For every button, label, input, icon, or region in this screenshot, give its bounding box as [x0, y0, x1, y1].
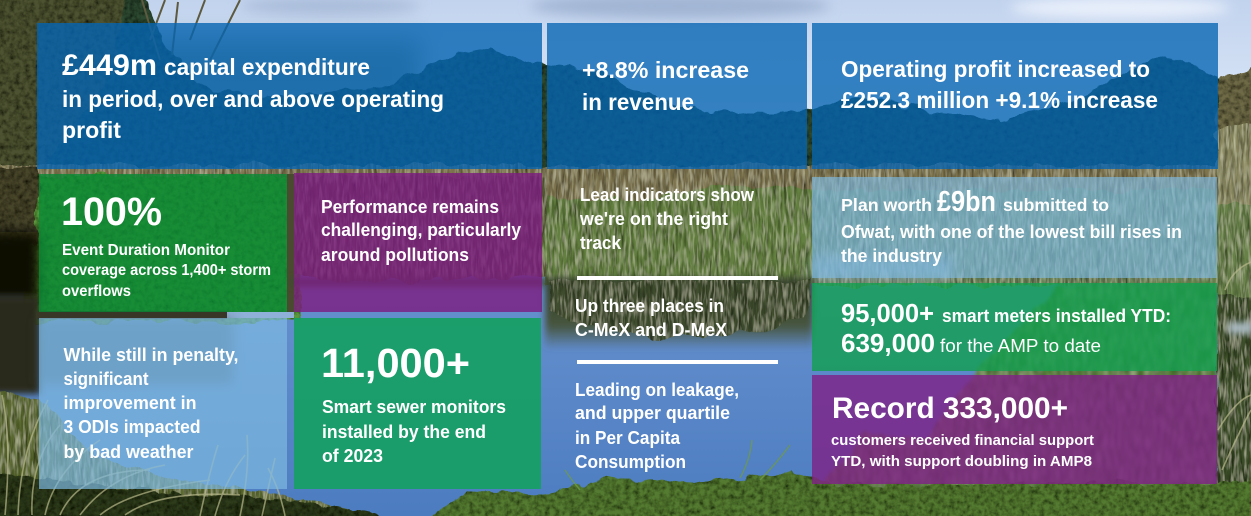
foliage behind green and purple right panels [820, 280, 1216, 490]
text: capital expenditure [62, 54, 444, 143]
panel: business plan: Ofwat, with one of the lowest bill rises in [841, 222, 1182, 242]
text: EDM coverage: coverage across 1,400+ storm [62, 262, 271, 279]
panel: revenue: +8.8% increase [582, 57, 749, 83]
panel: smart meters [812, 283, 1217, 371]
text: EDM coverage [62, 242, 271, 300]
panel: performance on pollutions [294, 173, 542, 312]
grass behind green panel [26, 176, 300, 322]
distant tree line [0, 0, 1251, 185]
panel: event duration monitors [39, 174, 287, 312]
right trees [1218, 62, 1251, 175]
text: capital expenditure: in period, over and above operating [62, 86, 444, 112]
foreground left grass [0, 388, 400, 516]
reed band [0, 165, 1251, 210]
panel: ODI penalty improvement: While still in penalty, [64, 344, 238, 365]
text: sewer monitors: installed by the end [322, 421, 486, 442]
text: leakage: in Per Capita [575, 427, 681, 448]
panel: operating profit: Operating profit increased to [841, 56, 1150, 82]
panel: ODI penalty improvement: significant [64, 368, 148, 389]
haze of trees behind first panel [120, 40, 420, 110]
panel: smart meters: smart meters installed YTD: [942, 306, 1171, 326]
stat: 95,000+: 95,000+ [841, 298, 934, 328]
panel: business plan [812, 177, 1217, 278]
panel: performance on pollutions: around pollutions [321, 244, 469, 265]
panel: smart sewer monitors [294, 318, 541, 489]
panel: ODI penalty improvement: 3 ODIs impacted [64, 416, 200, 437]
text: sewer monitors: Smart sewer monitors [322, 396, 506, 417]
reflection [290, 278, 545, 286]
text: leakage [575, 379, 739, 472]
reeds behind teal panel [812, 190, 1220, 286]
panel: customer financial support: customers received financial support [831, 432, 1094, 449]
stat: £449m: £449m [62, 49, 157, 82]
text: customer rankings [575, 295, 728, 340]
text: capital expenditure: profit [62, 117, 121, 143]
text: lead indicators [579, 184, 755, 253]
left dark bank [0, 165, 38, 245]
stat: 11,000+: 11,000+ [321, 340, 470, 386]
text: capital expenditure: capital expenditure [164, 54, 370, 80]
text: leakage: Leading on leakage, [575, 379, 739, 400]
panel: customer financial support: Record 333,000+ [832, 392, 1068, 425]
panel: performance on pollutions: challenging, particularly [321, 219, 522, 240]
text: lead indicators: track [580, 232, 622, 253]
panel: ODI penalty improvement [39, 318, 287, 489]
reeds behind purple panel [290, 176, 545, 282]
text: EDM coverage: overflows [62, 283, 131, 300]
panel: ODI penalty improvement: improvement in [64, 392, 196, 413]
panel: customer financial support: YTD, with support doubling in AMP8 [831, 453, 1092, 470]
panel: operating profit: £252.3 million +9.1% increase [841, 87, 1158, 113]
text: leakage: Consumption [575, 451, 686, 472]
panel: business plan: Plan worth [841, 195, 932, 215]
reed blades [2, 262, 1251, 516]
center green reeds [545, 186, 815, 285]
panel: revenue [547, 23, 807, 169]
panel: performance on pollutions: Performance remains [321, 196, 499, 217]
panel: smart meters: for the AMP to date [940, 336, 1101, 356]
text: sewer monitors: of 2023 [322, 445, 383, 466]
panel: operating profit [812, 23, 1218, 169]
text: lead indicators: we're on the right [579, 208, 728, 229]
text: sewer monitors [322, 396, 506, 466]
panel: customer financial support [812, 375, 1217, 484]
text: customer rankings: C-MeX and D-MeX [575, 319, 728, 340]
panel: capital expenditure [37, 23, 542, 169]
bank in the gap between green and purple panels [287, 174, 294, 312]
stat: £9bn: £9bn [937, 186, 996, 218]
panel: business plan: submitted to [1003, 195, 1109, 215]
water strip beneath green panel [227, 312, 294, 318]
left trees [0, 0, 125, 175]
sky [0, 0, 1251, 130]
foreground bottom bank [395, 470, 1251, 516]
stat: 100%: 100% [61, 190, 162, 234]
stat: 639,000: 639,000 [841, 328, 935, 358]
text: EDM coverage: Event Duration Monitor [62, 242, 230, 259]
panel: business plan: the industry [841, 246, 942, 266]
right bank [1216, 115, 1251, 210]
text: customer rankings: Up three places in [575, 295, 724, 316]
panel: revenue: in revenue [582, 89, 694, 115]
text: leakage: and upper quartile [575, 402, 730, 423]
text: lead indicators: Lead indicators show [580, 184, 755, 205]
panel: ODI penalty improvement: by bad weather [64, 441, 194, 462]
